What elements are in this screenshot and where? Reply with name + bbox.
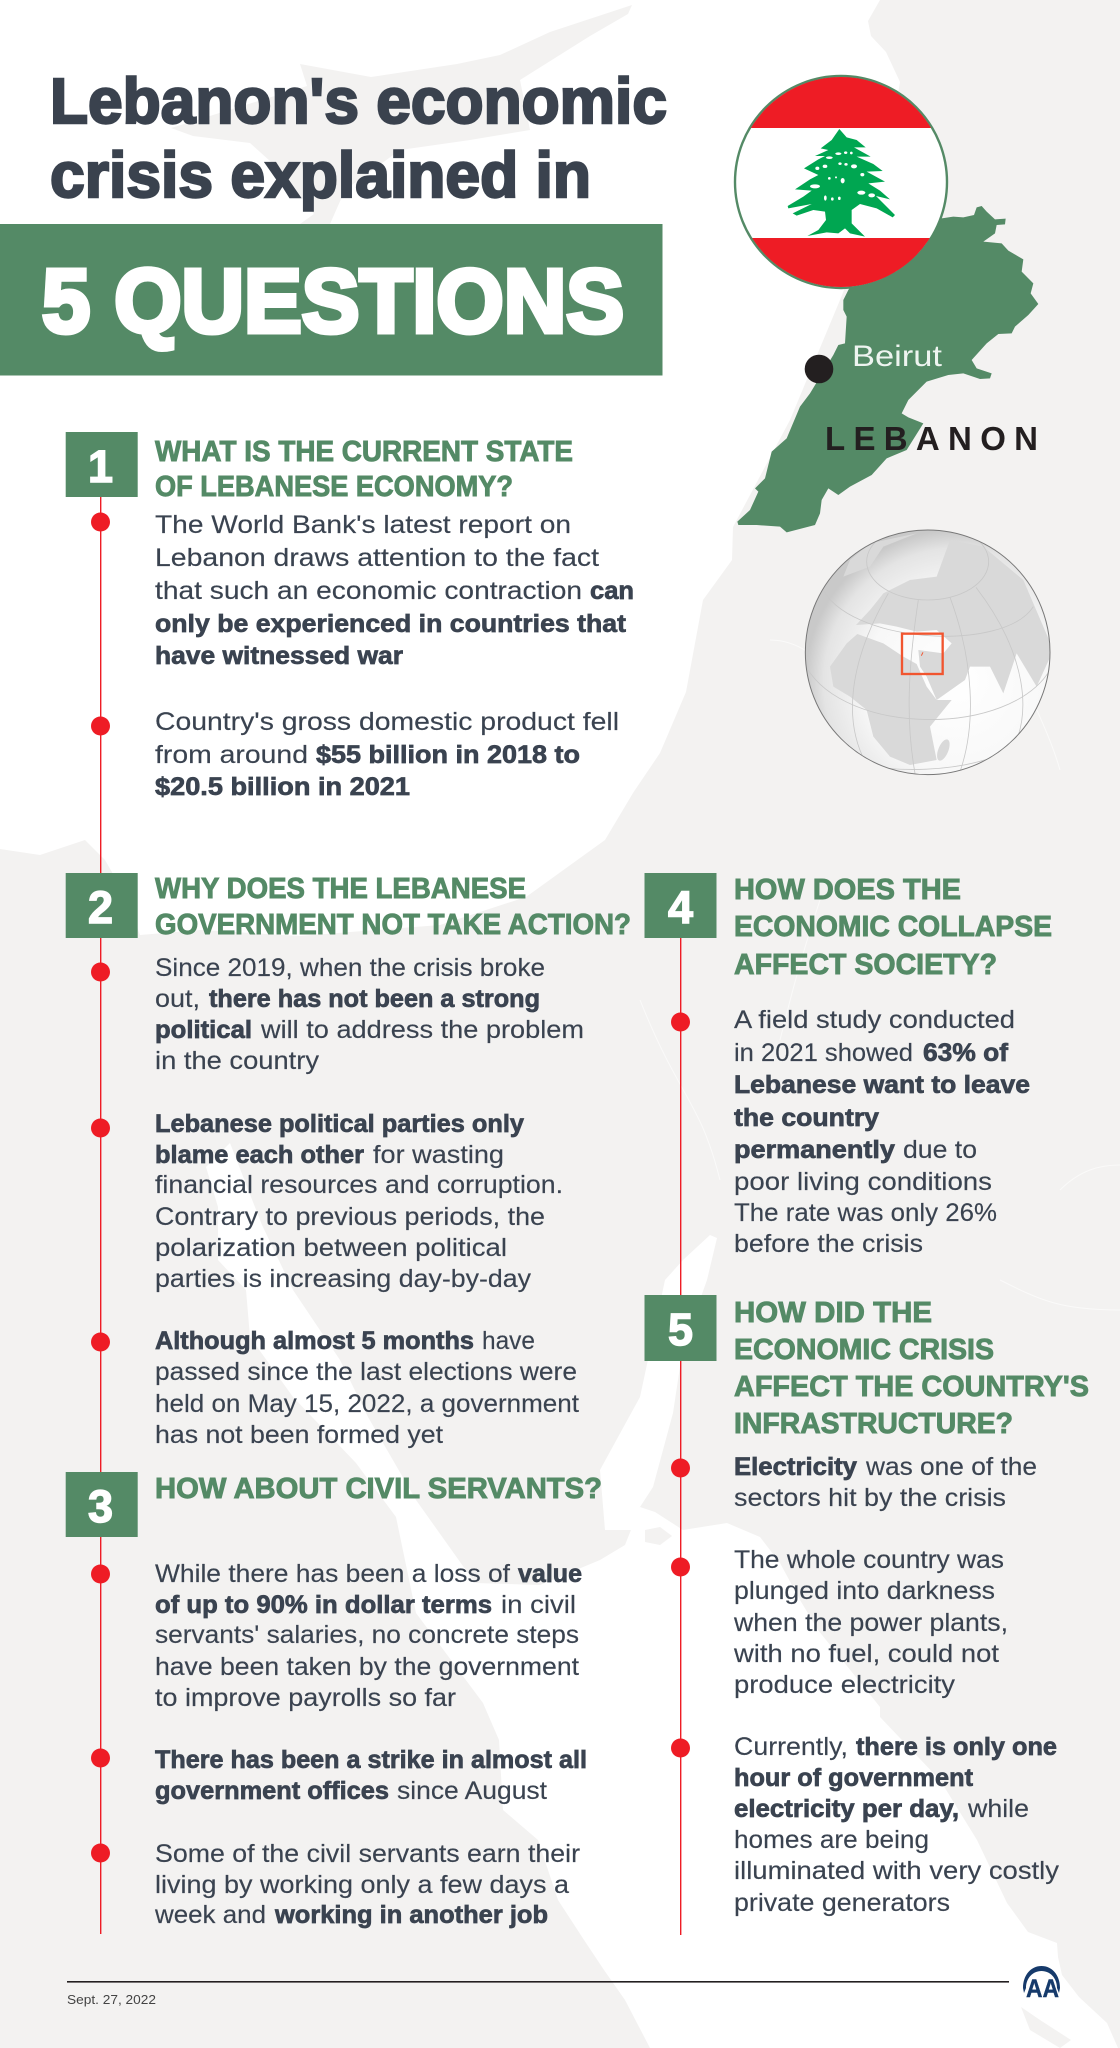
label: LEBANON: LEBANON — [825, 420, 1038, 457]
number badge 5 — [644, 1295, 716, 1361]
number badge 2 — [66, 873, 138, 938]
title: crisis explained in — [50, 139, 591, 211]
text block 1a: Lebanon draws attention to the fact — [155, 544, 599, 572]
title: Lebanon's economic — [50, 65, 667, 137]
text block 5c: there is only one — [856, 1733, 1057, 1761]
panel: question 3 — [66, 1472, 602, 1934]
text block 3c: living by working only a few days a — [155, 1871, 569, 1899]
panel: question 5 — [644, 1295, 1089, 1935]
globe locator — [805, 523, 1053, 775]
marker: Beirut: Beirut — [852, 340, 943, 373]
text block 2c: passed since the last elections were — [155, 1358, 577, 1386]
date: Sept. 27, 2022 — [67, 1992, 156, 2007]
title — [50, 65, 667, 211]
number badge 3: 3 — [88, 1481, 113, 1532]
text block 1a: can — [590, 577, 634, 605]
text block 3c — [154, 1840, 580, 1929]
text block 1a: that such an economic contraction — [155, 577, 582, 605]
number badge 1 — [66, 432, 138, 497]
text block 5b: produce electricity — [734, 1671, 956, 1699]
text block 3a: value — [518, 1560, 582, 1588]
text block 5c: hour of government — [734, 1764, 974, 1792]
text block 3b: There has been a strike in almost all — [155, 1746, 587, 1774]
text block 4: the country — [734, 1104, 879, 1132]
logo: AA — [1023, 1966, 1060, 2003]
text block 2c: has not been formed yet — [155, 1421, 443, 1449]
text block 2b: financial resources and corruption. — [155, 1171, 563, 1199]
text block 2a: Since 2019, when the crisis broke — [155, 954, 545, 982]
text block 2b: blame each other — [155, 1141, 364, 1169]
text block 5b: plunged into darkness — [734, 1577, 995, 1605]
heading 2: GOVERNMENT NOT TAKE ACTION? — [155, 909, 631, 941]
text block 2b: Contrary to previous periods, the — [155, 1203, 545, 1231]
number badge 5: 5 — [668, 1304, 693, 1355]
text block 2a: in the country — [155, 1047, 320, 1075]
heading 2: WHY DOES THE LEBANESE — [155, 873, 526, 905]
text block 4: Lebanese want to leave — [734, 1071, 1030, 1099]
text block 3a: of up to 90% in dollar terms — [155, 1591, 492, 1619]
text block 1b: $20.5 billion in 2021 — [155, 773, 410, 801]
island: Cyprus — [171, 5, 632, 224]
text block 2b — [155, 1110, 563, 1293]
text block 3b: government offices — [155, 1777, 389, 1805]
text block 2c: have — [482, 1327, 535, 1355]
number badge 1: 1 — [88, 441, 113, 492]
text block 2b: Lebanese political parties only — [155, 1110, 524, 1138]
heading 4: ECONOMIC COLLAPSE — [734, 911, 1052, 943]
text block 3a: in civil — [501, 1591, 576, 1619]
icon: cedar tree — [788, 129, 895, 237]
heading 5: AFFECT THE COUNTRY'S — [734, 1371, 1089, 1403]
text block 2a: out, — [155, 985, 200, 1013]
timeline 2 — [91, 938, 110, 1472]
text block 2a: will to address the problem — [260, 1016, 584, 1044]
text block 1b — [155, 708, 619, 801]
panel: question 1 — [66, 432, 634, 873]
text block 2b: parties is increasing day-by-day — [155, 1265, 532, 1293]
text block 1a — [155, 511, 634, 670]
timeline 5 — [671, 1361, 690, 1935]
banner: 5 questions — [0, 224, 662, 376]
text block 1b: $55 billion in 2018 to — [316, 741, 580, 769]
marker: Beirut — [805, 340, 943, 383]
text block 5c: electricity per day, — [734, 1795, 959, 1823]
text block 2b: for wasting — [373, 1141, 504, 1169]
text block 1b: Country's gross domestic product fell — [155, 708, 619, 736]
heading 5 — [734, 1297, 1089, 1440]
text block 1a: only be experienced in countries that — [155, 610, 627, 638]
text block 5a: Electricity — [734, 1453, 857, 1481]
heading 5: INFRASTRUCTURE? — [734, 1408, 1013, 1440]
text block 1b: from around — [155, 741, 308, 769]
text block 4: due to — [903, 1136, 977, 1164]
footer rule — [67, 1981, 1009, 1983]
map: Lebanon — [737, 206, 1038, 532]
text block 4: A field study conducted — [734, 1006, 1015, 1034]
text block 3a — [155, 1560, 582, 1712]
text block 5b: when the power plants, — [733, 1609, 1008, 1637]
timeline 4 — [671, 938, 690, 1295]
text block 5a: sectors hit by the crisis — [734, 1484, 1006, 1512]
text block 5c: illuminated with very costly — [734, 1857, 1060, 1885]
panel: question 4 — [644, 873, 1052, 1295]
timeline 3 — [91, 1537, 110, 1934]
text block 2a — [155, 954, 584, 1075]
text block 4: permanently — [734, 1136, 895, 1164]
heading 2 — [155, 873, 631, 941]
text block 5c: while — [967, 1795, 1029, 1823]
banner: 5 questions: 5 QUESTIONS — [42, 252, 624, 352]
text block 5a — [734, 1453, 1037, 1512]
text block 2b: polarization between political — [155, 1234, 507, 1262]
heading 4 — [734, 874, 1052, 981]
text block 1a: have witnessed war — [155, 642, 403, 670]
text block 3c: week and — [154, 1901, 266, 1929]
number badge 2: 2 — [88, 882, 113, 933]
heading 5: HOW DID THE — [734, 1297, 932, 1329]
text block 5c — [734, 1733, 1060, 1917]
text block 2c — [155, 1327, 579, 1449]
text block 4: before the crisis — [734, 1230, 923, 1258]
number badge 4: 4 — [668, 882, 693, 933]
text block 5b: with no fuel, could not — [733, 1640, 999, 1668]
text block 5c: homes are being — [734, 1826, 929, 1854]
locator square — [902, 634, 943, 674]
text block 5c: Currently, — [734, 1733, 848, 1761]
text block 3c: Some of the civil servants earn their — [155, 1840, 580, 1868]
text block 2c: held on May 15, 2022, a government — [155, 1390, 579, 1418]
text block 5c: private generators — [734, 1889, 950, 1917]
heading 4: AFFECT SOCIETY? — [734, 949, 997, 981]
flag of Lebanon — [730, 70, 952, 298]
text block 3a: to improve payrolls so far — [155, 1684, 456, 1712]
logo: AA: AA — [1026, 1975, 1059, 2003]
text block 2c: Although almost 5 months — [155, 1327, 474, 1355]
heading 1 — [155, 436, 573, 503]
text block 2a: there has not been a strong — [209, 985, 540, 1013]
text block 2a: political — [155, 1016, 252, 1044]
text block 4: poor living conditions — [734, 1168, 992, 1196]
text block 4: 63% of — [923, 1039, 1009, 1067]
heading 5: ECONOMIC CRISIS — [734, 1334, 994, 1366]
heading 1: OF LEBANESE ECONOMY? — [155, 471, 513, 503]
panel: question 2 — [66, 873, 631, 1472]
timeline 1 — [91, 497, 110, 873]
text block 3a: servants' salaries, no concrete steps — [155, 1621, 579, 1649]
text block 4: The rate was only 26% — [734, 1199, 997, 1227]
text block 5b: The whole country was — [734, 1546, 1004, 1574]
heading 1: WHAT IS THE CURRENT STATE — [155, 436, 573, 468]
number badge 4 — [644, 873, 716, 938]
text block 4 — [734, 1006, 1030, 1258]
text block 1a: The World Bank's latest report on — [155, 511, 571, 539]
text block 3a: While there has been a loss of — [155, 1560, 510, 1588]
text block 3c: working in another job — [274, 1901, 548, 1929]
text block 3b — [155, 1746, 587, 1805]
text block 4: in 2021 showed — [734, 1039, 913, 1067]
number badge 3 — [66, 1472, 138, 1537]
heading 4: HOW DOES THE — [734, 874, 961, 906]
heading 3: HOW ABOUT CIVIL SERVANTS? — [155, 1473, 602, 1505]
text block 3b: since August — [397, 1777, 547, 1805]
text block 5a: was one of the — [865, 1453, 1037, 1481]
text block 5b — [733, 1546, 1008, 1699]
text block 3a: have been taken by the government — [155, 1653, 579, 1681]
